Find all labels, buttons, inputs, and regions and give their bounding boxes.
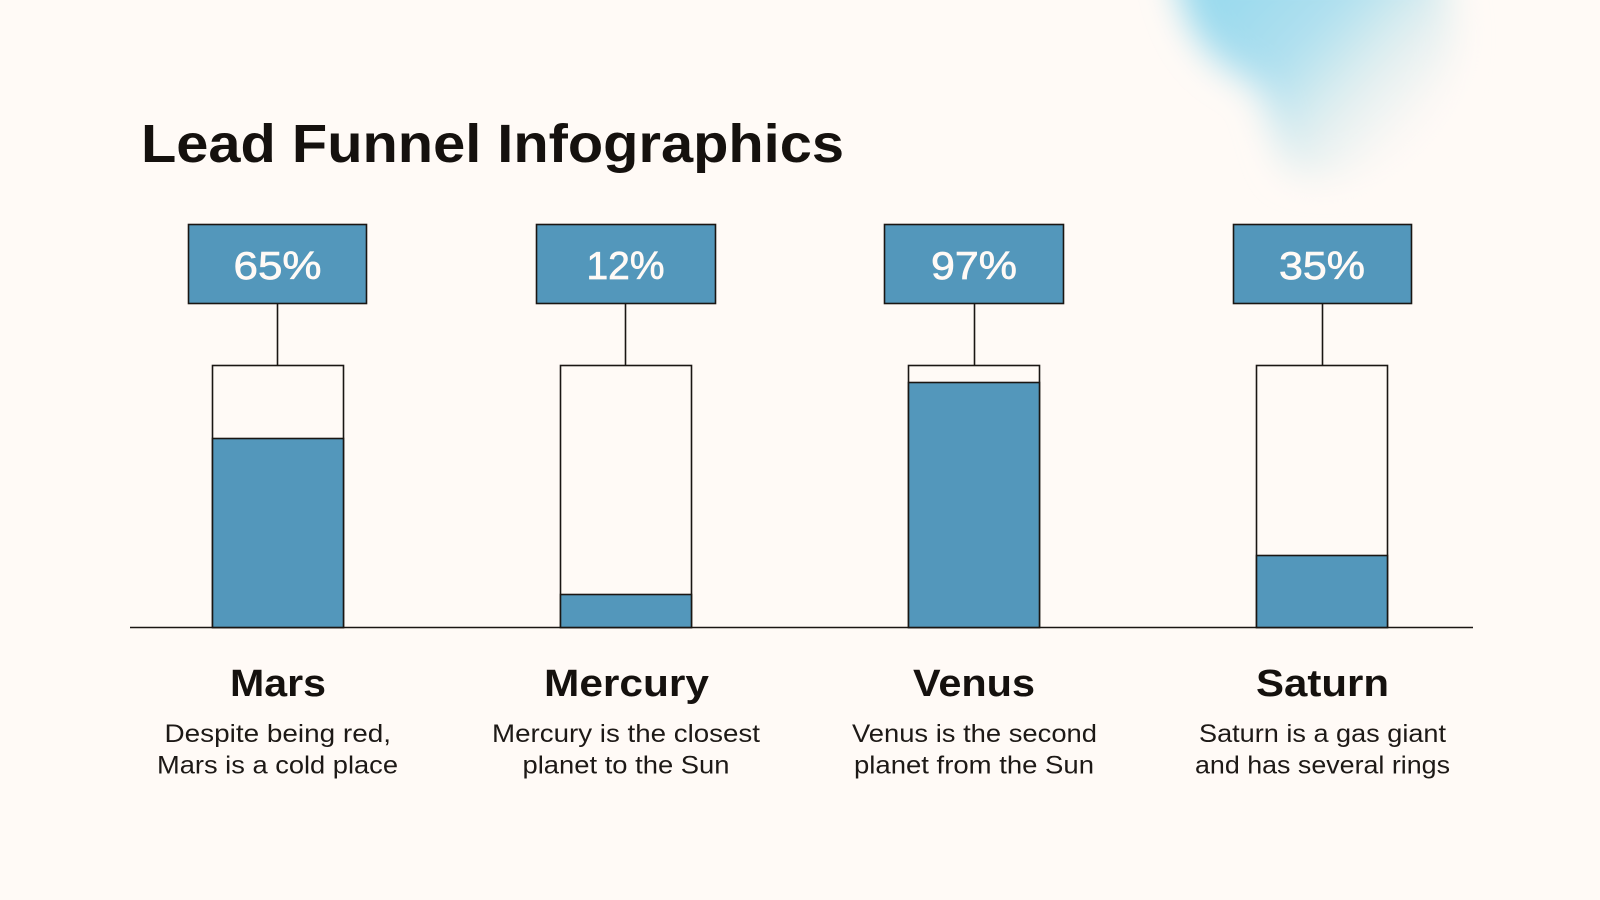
- percent label: 97%: 97%: [931, 245, 1017, 288]
- name: Mars: [230, 663, 326, 705]
- description: Venus is the second: [852, 720, 1097, 748]
- bar: 97% filled: [908, 366, 1040, 628]
- description: Despite being red,: [164, 720, 391, 748]
- connector: [276, 304, 278, 366]
- description: [852, 720, 1097, 780]
- percent label: 12%: 12%: [586, 245, 664, 288]
- column: Mercury: [492, 224, 760, 780]
- connector: [624, 304, 626, 366]
- percent label: 35%: 35%: [1279, 245, 1365, 288]
- percent label: 97%: [884, 224, 1064, 304]
- percent label: 12%: [536, 224, 716, 304]
- bar: 35% filled: [1256, 366, 1388, 628]
- description: and has several rings: [1195, 752, 1450, 780]
- name: Mercury: [544, 663, 709, 705]
- bar: 65% filled: [212, 366, 344, 628]
- description: Mercury is the closest: [492, 720, 760, 748]
- description: planet to the Sun: [522, 752, 730, 780]
- decorative blue blob: [1172, 0, 1455, 178]
- name: Venus: [913, 663, 1035, 705]
- bar: 12% filled: [560, 366, 692, 628]
- percent label: 65%: 65%: [234, 245, 322, 288]
- connector: [1322, 304, 1324, 366]
- percent label: 65%: [188, 224, 366, 304]
- column: Mars: [157, 224, 398, 780]
- name: Saturn: [1256, 663, 1389, 705]
- description: [157, 720, 398, 780]
- baseline axis: [130, 626, 1473, 628]
- description: Mars is a cold place: [157, 752, 398, 780]
- description: [492, 720, 760, 780]
- column: Saturn: [1195, 224, 1450, 780]
- title: Lead Funnel Infographics: [141, 114, 844, 174]
- description: Saturn is a gas giant: [1199, 720, 1446, 748]
- description: planet from the Sun: [854, 752, 1094, 780]
- percent label: 35%: [1234, 224, 1412, 304]
- column: Venus: [852, 224, 1097, 780]
- description: [1195, 720, 1450, 780]
- connector: [974, 304, 976, 366]
